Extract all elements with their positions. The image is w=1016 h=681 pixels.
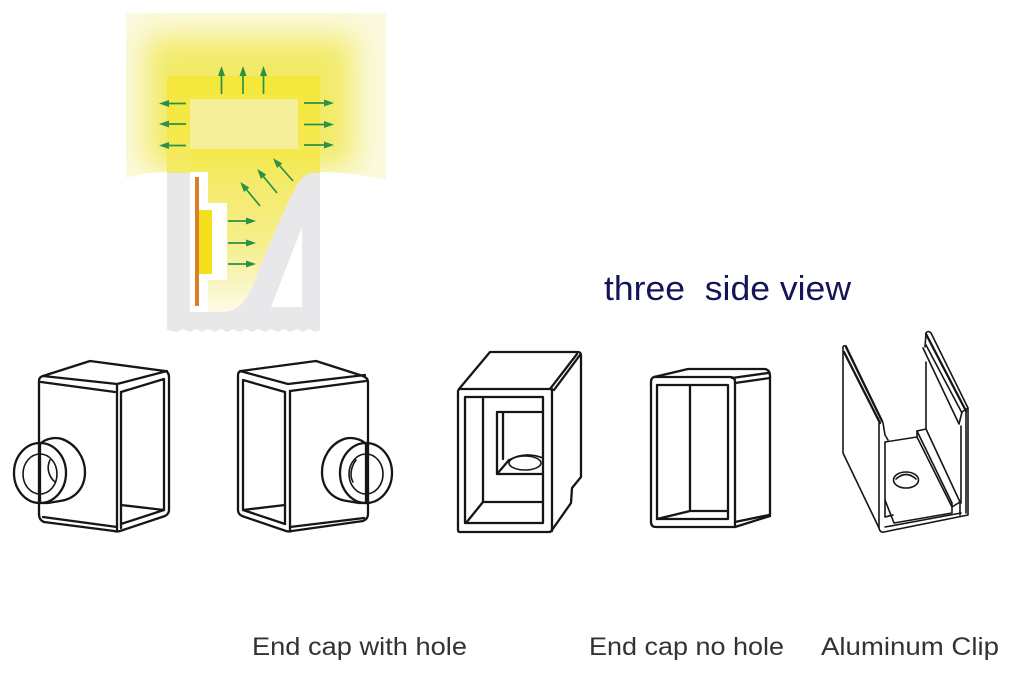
drawing: end cap interior view with hole: [458, 352, 581, 532]
diagram: LED neon profile light cross-section: [126, 13, 386, 332]
heading: three side view: three side view: [604, 270, 851, 308]
clip hole: [894, 472, 918, 488]
drawing: end cap no hole: [651, 369, 770, 527]
pale diffuser core: [190, 99, 298, 149]
clip base with rib: [885, 431, 917, 517]
grey silicone profile: [167, 172, 320, 332]
label: end cap with hole: End cap with hole: [252, 633, 467, 661]
drawing: end cap with side hole, facing left: [14, 361, 169, 532]
yellow diffuser square: [167, 76, 320, 173]
label: end cap no hole: End cap no hole: [589, 633, 784, 661]
arrows: light direction: [168, 75, 325, 264]
yellow light channel: [190, 149, 320, 312]
white LED cavity: [190, 172, 227, 312]
copper circuit board: [195, 177, 199, 306]
clip left wall: [843, 346, 888, 528]
hole collar: [322, 438, 392, 503]
drawing: end cap with side hole, facing right: [238, 361, 392, 532]
hole collar: [14, 438, 85, 503]
light glow: [126, 13, 386, 183]
LED chip: [199, 210, 212, 274]
drawing: aluminum clip: [843, 332, 968, 532]
label: aluminum clip: Aluminum Clip: [821, 633, 999, 661]
clip right wall and frame: [879, 332, 968, 532]
hole: [509, 456, 541, 470]
white triangular cavity: [271, 227, 302, 307]
